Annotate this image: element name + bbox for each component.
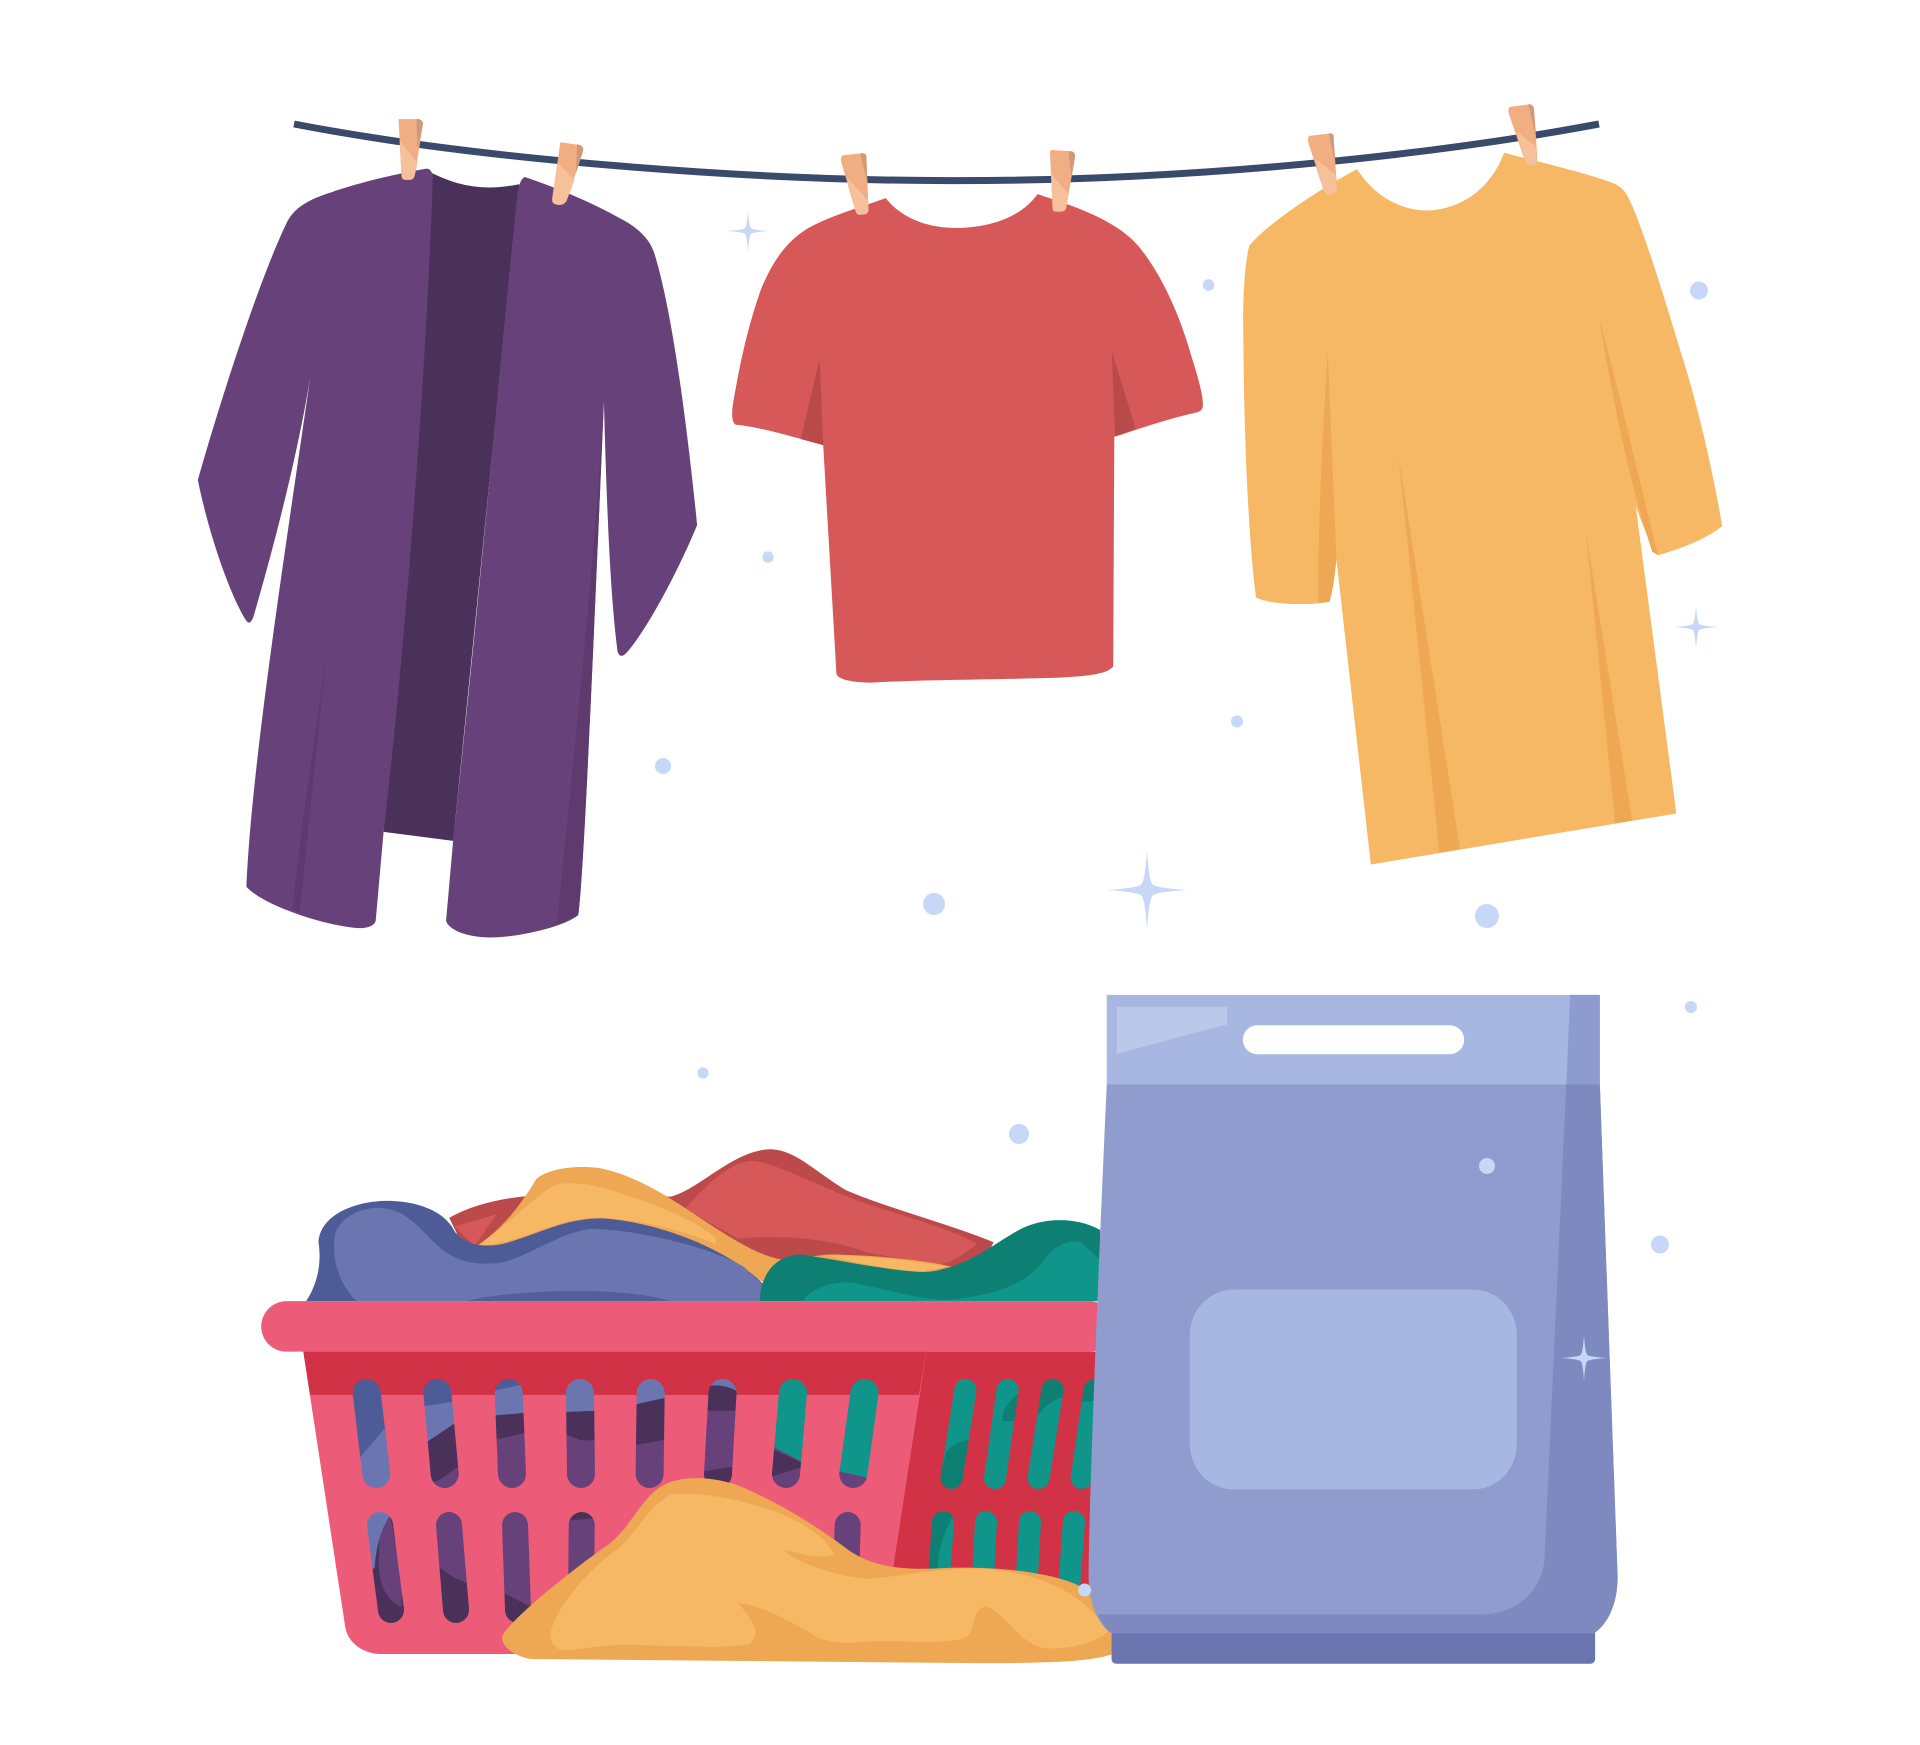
green garment [760, 1220, 1100, 1301]
laundry basket with clothes [261, 1149, 1114, 1663]
basket front upper band [303, 1352, 926, 1395]
bag top band side [1566, 995, 1600, 1084]
robe left panel [198, 169, 433, 928]
clothes pegs on t-shirt [841, 150, 1075, 215]
basket rim [261, 1301, 1114, 1352]
robe left fold [292, 654, 326, 912]
t-shirt body [732, 194, 1203, 683]
clothes pegs on robe [399, 119, 583, 205]
t-shirt left sleeve shadow [801, 359, 823, 445]
sparkle [1107, 850, 1187, 930]
clothesline [294, 124, 1599, 181]
sparkles and dots [655, 210, 1718, 1596]
red t-shirt [732, 194, 1203, 683]
sparkle [727, 210, 769, 252]
bag base [1112, 1622, 1595, 1664]
clothes piled in basket [261, 1149, 1114, 1654]
bag top band [1107, 995, 1600, 1084]
robe lining [384, 173, 519, 841]
robe right fold [557, 401, 604, 925]
purple robe [198, 169, 697, 937]
sparkle [1561, 1335, 1607, 1381]
yellow shirt body [1243, 153, 1722, 864]
front basket slots [352, 1379, 878, 1623]
yellow shirt [1243, 153, 1722, 864]
robe right panel [446, 177, 697, 937]
bag glare [1117, 1007, 1227, 1054]
red garment [449, 1149, 994, 1270]
yellow shirt folds [1318, 317, 1658, 853]
blue garment [306, 1201, 764, 1301]
basket front wall [303, 1352, 926, 1654]
detergent bag [1089, 995, 1618, 1664]
laundry illustration [198, 104, 1722, 1664]
sparkle [1674, 605, 1718, 649]
t-shirt right sleeve shadow [1112, 351, 1136, 436]
basket side wall [890, 1352, 1100, 1586]
bag handle [1243, 1025, 1464, 1054]
side basket slots [928, 1379, 1094, 1586]
bag label [1190, 1290, 1517, 1489]
yellow garment [477, 1167, 952, 1284]
clothes pegs on yellow shirt [1308, 104, 1538, 195]
bag side shadow [1098, 1084, 1618, 1633]
bag body [1089, 1084, 1618, 1633]
yellow garment heap in front of basket [502, 1478, 1111, 1663]
